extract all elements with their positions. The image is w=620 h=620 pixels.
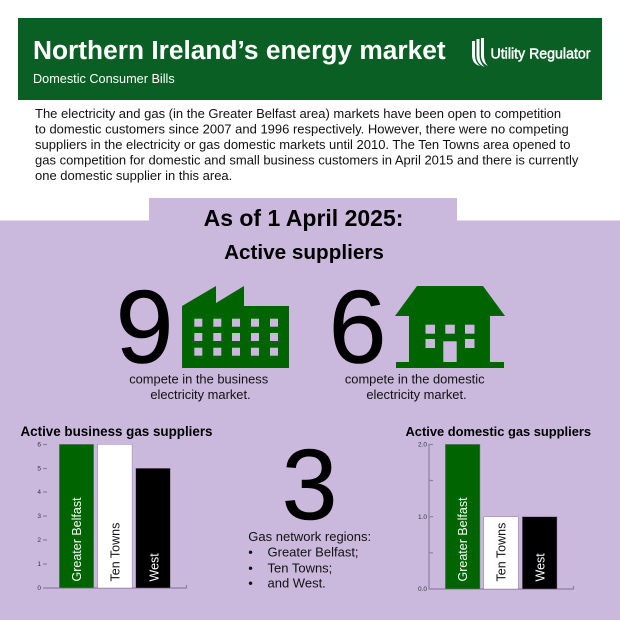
text block: intro paragraph: gas competition for domestic and small business customers in April 2015 and there is currently xyxy=(35,152,579,168)
bar: Ten Towns: Ten Towns xyxy=(108,523,122,582)
heading: as of date: As of 1 April 2025: xyxy=(204,205,403,231)
caption: domestic electricity: electricity market. xyxy=(366,387,467,402)
chart: active business gas suppliers: 0 xyxy=(37,585,41,592)
number: 6 domestic suppliers: 6 xyxy=(329,270,386,386)
title: Northern Ireland’s energy market xyxy=(33,35,446,65)
icon: house xyxy=(395,286,505,368)
bar: Ten Towns: Ten Towns xyxy=(494,523,508,582)
logo: Utility Regulator: Utility Regulator xyxy=(490,46,591,62)
text block: intro paragraph: The electricity and gas (in the Greater Belfast area) markets have been open to competition xyxy=(35,106,561,121)
text block: intro paragraph: suppliers in the electricity or gas domestic markets until 2010. The Ten Towns area opened to xyxy=(35,137,570,152)
bar: West: West xyxy=(534,553,548,582)
chart: active business gas suppliers: 3 xyxy=(37,513,41,520)
text block: gas network regions: • xyxy=(248,576,253,591)
chart: active business gas suppliers: 5 xyxy=(37,466,41,473)
text block: gas network regions: Ten Towns; xyxy=(268,560,332,575)
text block: gas network regions: Gas network regions: xyxy=(248,529,371,544)
bar: West: West xyxy=(148,553,162,582)
chart: active business gas suppliers: 2 xyxy=(37,537,41,544)
bar: Greater Belfast xyxy=(445,444,480,589)
logo: Utility Regulator xyxy=(472,38,591,67)
chart: active business gas suppliers: 6 xyxy=(37,442,41,449)
panel: header banner xyxy=(18,18,602,100)
caption: domestic electricity: compete in the domestic xyxy=(345,372,485,386)
chart: active domestic gas suppliers: 1.0 xyxy=(418,514,427,521)
text block: intro paragraph: to domestic customers since 2007 and 1996 respectively. However, there were no competing xyxy=(35,122,569,136)
caption: business electricity: compete in the business xyxy=(129,372,268,386)
chart: active business gas suppliers: 1 xyxy=(37,561,41,568)
chart: active business gas suppliers: 4 xyxy=(37,489,41,496)
text block: gas network regions: • xyxy=(248,545,253,560)
text block: gas network regions: Greater Belfast; xyxy=(268,545,359,560)
bar: Greater Belfast xyxy=(59,444,94,588)
number: 3 gas regions: 3 xyxy=(282,429,337,541)
chart title: Active business gas suppliers xyxy=(20,424,213,439)
bar: West xyxy=(136,468,170,588)
icon: factory xyxy=(182,286,289,368)
chart: active business gas suppliers xyxy=(20,424,213,592)
caption: business electricity: electricity market. xyxy=(150,387,251,402)
chart: active domestic gas suppliers: 2.0 xyxy=(418,442,427,449)
bar: Ten Towns xyxy=(484,517,518,589)
panel: lilac background xyxy=(0,198,620,620)
bar: Greater Belfast: Greater Belfast xyxy=(456,497,470,582)
text block: gas network regions: and West. xyxy=(268,576,326,591)
chart: active domestic gas suppliers: 0.0 xyxy=(418,586,427,593)
chart title: Active domestic gas suppliers xyxy=(406,424,591,439)
text block: intro paragraph: one domestic supplier in this area. xyxy=(35,168,232,183)
chart: active domestic gas suppliers xyxy=(406,424,591,593)
text block: gas network regions: • xyxy=(248,560,253,575)
bar: West xyxy=(522,517,557,589)
subtitle: Domestic Consumer Bills xyxy=(33,72,175,86)
number: 9 business suppliers: 9 xyxy=(116,270,173,386)
bar: Greater Belfast: Greater Belfast xyxy=(70,497,84,582)
heading: active suppliers: Active suppliers xyxy=(224,241,384,264)
bar: Ten Towns xyxy=(98,444,132,588)
